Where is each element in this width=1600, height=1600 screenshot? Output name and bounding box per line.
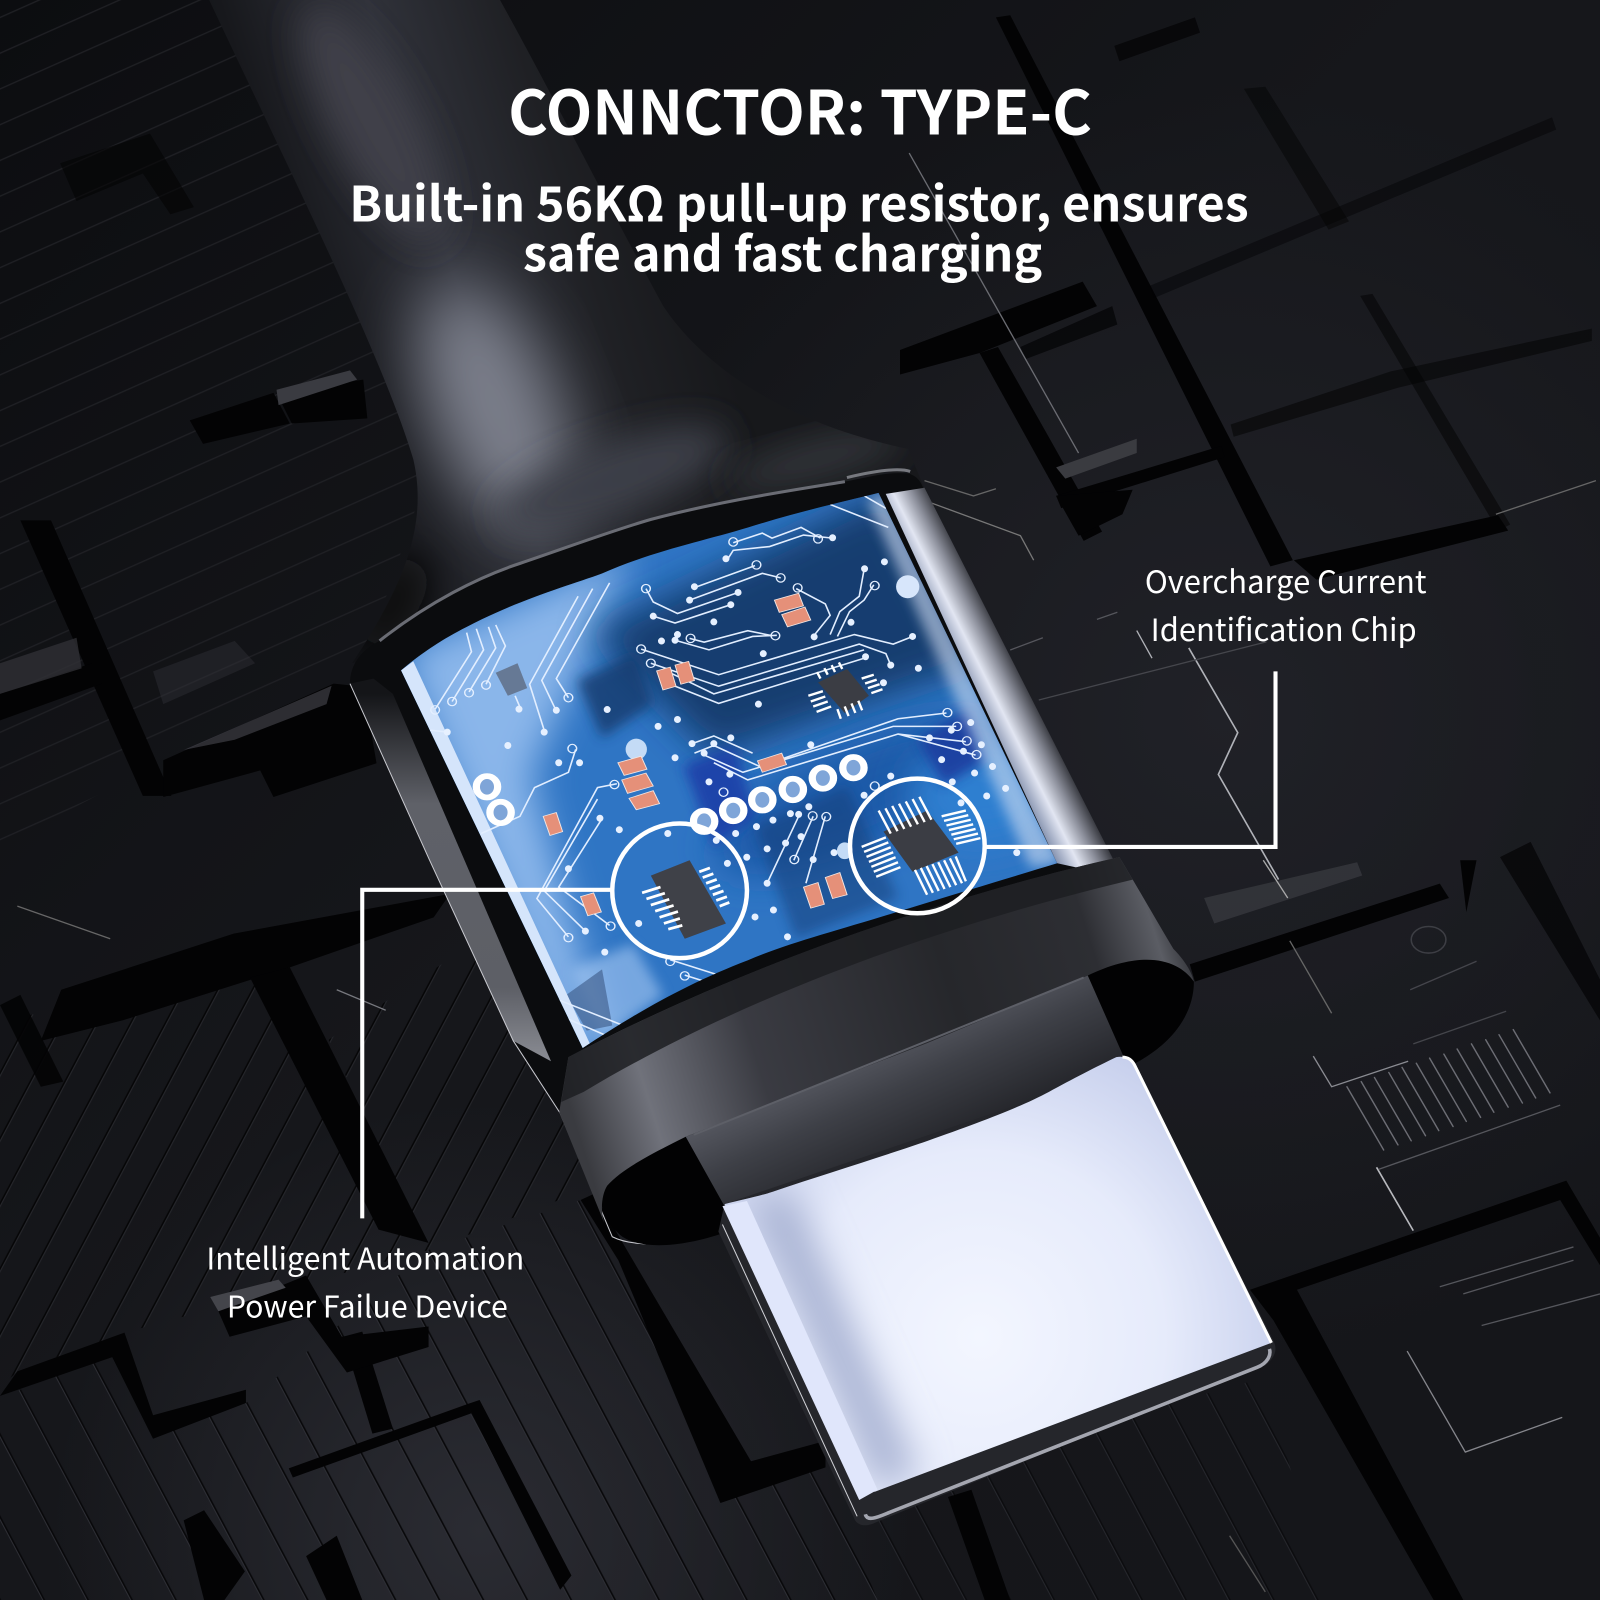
- label: overcharge chip: Identification Chip: [1151, 605, 1417, 650]
- ring pads: [476, 757, 864, 832]
- pads: [447, 538, 1017, 952]
- callout ring: current identification chip: [850, 779, 985, 913]
- pcb artwork traced in local coordinates: [430, 493, 1017, 1040]
- left glass edge: [350, 679, 714, 1244]
- right glass edge: [886, 488, 1122, 878]
- shell underside: [718, 1065, 1275, 1525]
- collar: opening shadow: [601, 955, 1194, 1245]
- collar: black front band: [559, 857, 1194, 1222]
- leader line: right callout: [985, 671, 1276, 847]
- label: power failure device: Power Failue Device: [227, 1282, 508, 1326]
- board ring markings: [1411, 927, 1446, 953]
- pink components: [543, 593, 847, 916]
- subtitle: safe and fast charging: [523, 215, 1042, 285]
- label: overcharge chip: [1145, 557, 1427, 650]
- lower rim highlight: [865, 1349, 1270, 1518]
- connector neck: [686, 976, 1127, 1206]
- memory-strip stripes: [1347, 1030, 1550, 1150]
- shell right edge: [1122, 1057, 1271, 1343]
- connector metal shell: [718, 1057, 1275, 1525]
- circled chip: power-failure device: [642, 860, 729, 939]
- title: CONNCTOR: TYPE-C: [508, 66, 1092, 153]
- cable and strain relief: [209, 0, 924, 663]
- faded chip: [496, 663, 527, 696]
- label: overcharge chip: Overcharge Current: [1145, 557, 1427, 602]
- raised highlights on the board: [153, 641, 255, 704]
- subtitle: [349, 165, 1249, 285]
- rim at top of transparent housing: [350, 470, 1122, 1113]
- upper chip: [808, 662, 883, 719]
- circled chip: overcharge identification: [862, 797, 980, 895]
- callout ring: power failure device: [612, 823, 747, 958]
- shell left bevel: [722, 1201, 878, 1500]
- open vias: [431, 535, 981, 980]
- label: power failure device: Intelligent Automation: [206, 1234, 524, 1278]
- leader line: left callout: [362, 890, 612, 1218]
- shell shading beside bevel: [747, 1189, 918, 1490]
- circuit traces: [430, 493, 976, 1040]
- label: power failure device: [206, 1234, 524, 1326]
- transparent window: blue circuit board: [401, 490, 1061, 1061]
- shell top face: [724, 1057, 1271, 1492]
- subtitle: Built-in 56KΩ pull-up resistor, ensures: [349, 165, 1249, 235]
